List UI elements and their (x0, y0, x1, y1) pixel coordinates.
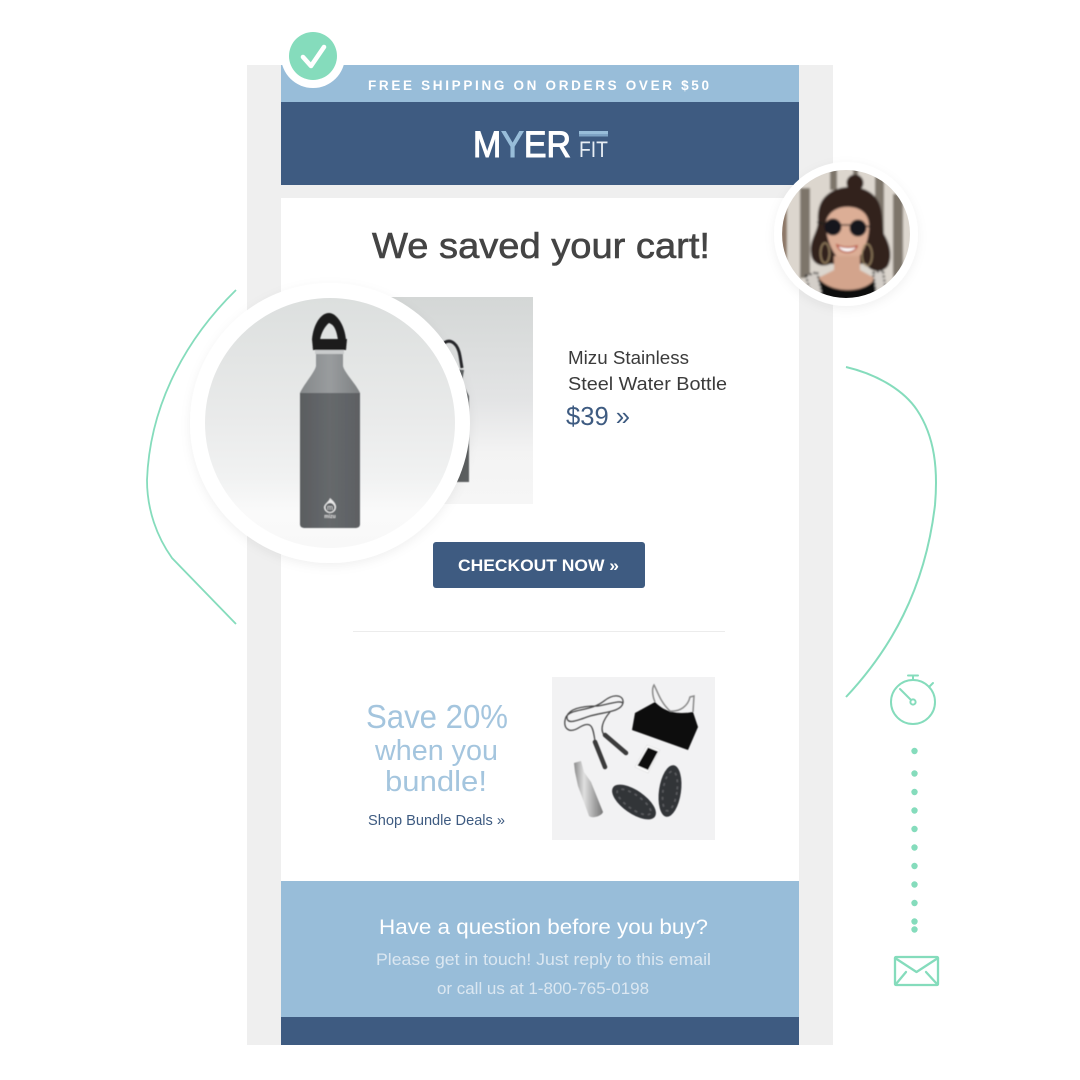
right connector line (846, 367, 936, 697)
face (826, 207, 869, 263)
bundle offer text: bundle! (385, 766, 487, 798)
bundle offer text: Save 20% (366, 698, 508, 735)
neck and chest (818, 254, 874, 292)
footer contact block: Have a question before you buy? (379, 916, 708, 939)
abandoned cart email infographic (146, 32, 940, 1045)
bundle offer text (366, 698, 508, 829)
dotted timeline (911, 748, 918, 933)
bottle logo: m (327, 505, 333, 512)
shoes (607, 764, 685, 826)
water bottle (300, 313, 360, 528)
sports bra (632, 685, 698, 750)
bundle photo (552, 677, 715, 840)
product price: $39 » (566, 401, 630, 431)
logo: Myer Fit: FIT (579, 137, 608, 162)
check mark (303, 47, 324, 66)
icon: stopwatch (891, 676, 935, 724)
hair (811, 174, 891, 271)
shipping banner (281, 65, 799, 102)
checkout button: CHECKOUT NOW » (458, 556, 619, 575)
striped backdrop (781, 168, 903, 284)
hoop earrings (820, 243, 872, 266)
header with logo (281, 102, 799, 185)
left connector line (147, 290, 236, 624)
product photo (380, 297, 533, 504)
sunglasses (817, 218, 871, 236)
smile (837, 245, 857, 252)
check badge (281, 24, 345, 88)
footer contact block: Please get in touch! Just reply to this email (376, 950, 711, 969)
product name (568, 348, 727, 394)
product name: Steel Water Bottle (568, 374, 727, 394)
jump rope (565, 696, 626, 767)
photo bottle behind circle (430, 341, 469, 482)
steel bottle (574, 761, 603, 817)
phone (635, 745, 660, 773)
checkout button (433, 542, 645, 588)
footer contact block (281, 881, 799, 1017)
portrait circle (782, 164, 910, 308)
bundle link: Shop Bundle Deals » (368, 812, 505, 829)
product name: Mizu Stainless (568, 348, 689, 368)
logo: Myer Fit: MYER (473, 124, 571, 165)
email body (281, 198, 799, 881)
bottle logo: mizu (324, 514, 336, 520)
black top (818, 278, 876, 298)
icon: envelope (895, 957, 938, 985)
bottle logo (324, 498, 336, 520)
email background panel (247, 65, 833, 1045)
footer bar (281, 1017, 799, 1045)
footer contact block: or call us at 1-800-765-0198 (437, 979, 649, 998)
shipping banner: FREE SHIPPING ON ORDERS OVER $50 (368, 78, 709, 93)
gingham straps (806, 270, 886, 296)
heading: We saved your cart! (372, 225, 710, 266)
product circle callout (190, 283, 470, 563)
bundle offer text: when you (374, 735, 498, 767)
